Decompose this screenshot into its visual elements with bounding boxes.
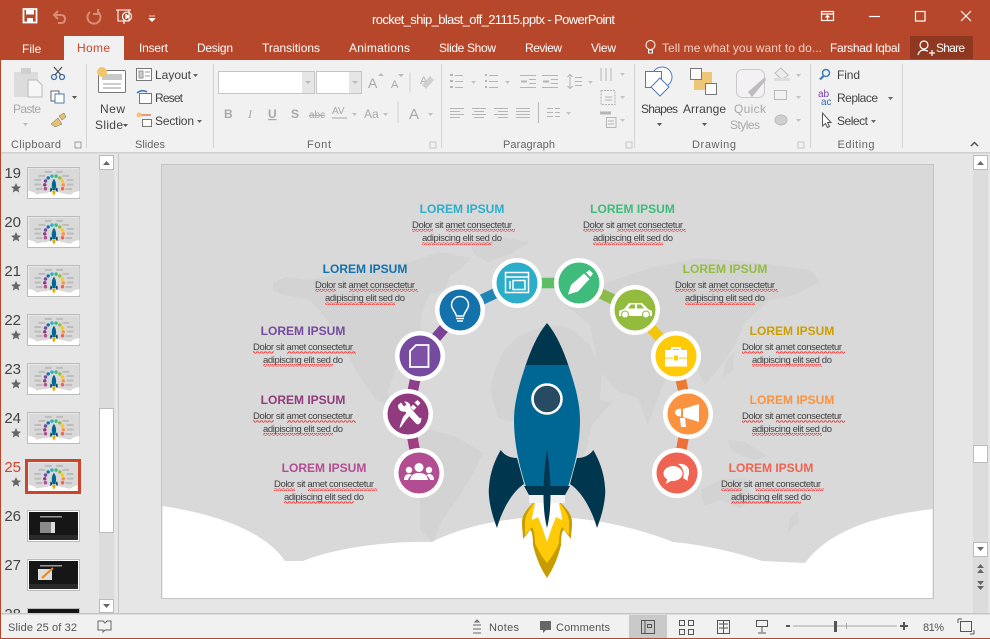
ribbon tabs: Review	[525, 41, 562, 55]
label: lime: adipiscing elit sed do	[685, 293, 765, 304]
font group: U	[268, 107, 277, 121]
icon: fill outline effects	[774, 68, 790, 125]
rocket base band	[524, 486, 570, 495]
thumbnail: slide 25 selected: 25	[4, 459, 21, 476]
window controls	[821, 11, 971, 21]
slides group: Section	[155, 114, 194, 128]
node: car	[610, 285, 660, 335]
label: pink	[274, 461, 377, 504]
font group: A	[420, 75, 428, 87]
label: gold	[742, 324, 845, 367]
icon: format painter	[51, 113, 66, 127]
label: blue: Dolor sit amet consectetur	[315, 280, 415, 291]
icon: lightbulb	[646, 40, 655, 53]
ribbon	[0, 60, 990, 154]
icon: paragraph controls	[450, 68, 616, 128]
icon: notes	[473, 620, 481, 633]
label: pink: adipiscing elit sed do	[284, 492, 364, 503]
ribbon tabs: Slide Show	[439, 41, 496, 55]
title bar	[0, 0, 990, 60]
label: orange: Dolor sit amet consectetur	[742, 411, 842, 422]
label: gold: adipiscing elit sed do	[752, 355, 832, 366]
icon: fit to window	[958, 619, 974, 634]
status bar: 81%	[923, 622, 944, 634]
icon: browser window	[506, 272, 528, 292]
thumbnail: slide 22	[4, 312, 80, 346]
slides group: Reset	[155, 91, 184, 105]
ribbon tabs	[22, 36, 973, 60]
label: lime: Dolor sit amet consectetur	[675, 280, 775, 291]
node: pencil	[554, 258, 604, 308]
thumbnail: slide 21	[4, 263, 80, 296]
icon: cut	[52, 67, 64, 80]
icon: find	[820, 70, 830, 80]
icon: copy	[51, 91, 64, 103]
icon: arrange	[690, 68, 716, 94]
icon: briefcase	[665, 347, 687, 366]
icon: comments	[540, 621, 551, 633]
thumbnail: slide 23	[4, 361, 80, 394]
label: pink: LOREM IPSUM	[282, 461, 366, 475]
right scrollbar	[973, 155, 988, 613]
thumbnail: slide 20	[4, 214, 80, 248]
label: blue: adipiscing elit sed do	[325, 293, 405, 304]
label: magenta: adipiscing elit sed do	[263, 424, 343, 435]
label: magenta	[253, 393, 356, 436]
label: red: LOREM IPSUM	[729, 461, 813, 475]
font group: A	[409, 106, 419, 123]
icon: car	[619, 303, 652, 318]
label: purple: adipiscing elit sed do	[263, 355, 343, 366]
thumbnail: slide 26: 26	[4, 508, 21, 525]
editing group: Find	[837, 68, 860, 82]
icon: megaphone	[675, 404, 699, 427]
icon: people	[404, 463, 434, 480]
drawing group: Shapes	[641, 102, 678, 116]
icon: reset	[137, 91, 152, 104]
thumbnail: slide 24	[4, 410, 80, 444]
drawing group: Drawing	[692, 139, 736, 151]
icon: select	[822, 113, 831, 128]
font group: A	[391, 79, 399, 91]
icon: section	[136, 112, 152, 126]
icon: customize toolbar	[149, 16, 155, 22]
status bar: Slide 25 of 32	[8, 622, 77, 634]
icon: wrench and screwdriver	[398, 400, 421, 428]
label: teal: LOREM IPSUM	[420, 202, 504, 216]
label: purple	[253, 324, 356, 367]
thumbnail: slide 27	[4, 557, 80, 590]
connector arc	[408, 283, 688, 473]
thumbnail: slide 19	[4, 165, 80, 198]
thumbnail scrollbar	[99, 155, 114, 613]
font name and size boxes	[218, 72, 362, 94]
slides group	[95, 67, 202, 151]
node: chat	[652, 448, 702, 498]
icon: speech bubbles	[664, 464, 689, 484]
rocket body	[514, 365, 580, 495]
editing group: Replace	[837, 91, 878, 105]
rocket fins	[489, 450, 605, 528]
ribbon tabs: Animations	[349, 41, 410, 55]
rocket nozzle	[529, 495, 565, 503]
ribbon tabs: Insert	[139, 41, 169, 55]
icon: spell check	[98, 621, 111, 632]
label: red	[721, 461, 824, 504]
font group: abc	[309, 110, 325, 121]
label: orange: LOREM IPSUM	[750, 393, 834, 407]
clipboard group: Clipboard	[11, 139, 61, 151]
ribbon tabs: Home	[77, 41, 110, 55]
icon: replace: ac	[821, 97, 832, 108]
thumbnail: slide 26	[4, 508, 80, 542]
thumbnail: slide 19: 19	[4, 165, 21, 182]
label: teal	[412, 202, 515, 245]
font group: I	[247, 107, 253, 121]
cloud	[162, 506, 932, 598]
node: megaphone	[663, 389, 713, 439]
label: teal: adipiscing elit sed do	[422, 233, 502, 244]
share button: Share	[936, 41, 965, 55]
icon: shapes	[646, 67, 672, 96]
clipboard group: Paste	[13, 102, 41, 116]
rocket	[489, 323, 605, 578]
label: orange	[742, 393, 845, 436]
icon: collapse ribbon	[971, 142, 978, 146]
drawing group: Quick	[734, 102, 767, 116]
ribbon tabs: Farshad Iqbal	[830, 41, 900, 55]
slide canvas	[162, 164, 934, 598]
thumbnail: slide 27: 27	[4, 557, 21, 574]
node: document	[395, 331, 445, 381]
thumbnail: slide 24: 24	[4, 410, 21, 427]
label: pink: Dolor sit amet consectetur	[274, 479, 374, 490]
font group: B	[224, 107, 233, 121]
font group: A	[368, 75, 378, 91]
view buttons	[629, 615, 768, 638]
font group: AV	[332, 106, 345, 117]
ribbon tabs: File	[22, 42, 42, 56]
label: purple: Dolor sit amet consectetur	[253, 342, 353, 353]
icon: undo and redo	[54, 9, 100, 24]
icon: paste	[14, 68, 42, 97]
slides group: Slide	[95, 118, 123, 132]
thumbnail: slide 25 selected	[4, 459, 80, 492]
rocket flame	[522, 503, 572, 578]
slides group: Layout	[155, 68, 192, 82]
ribbon tabs: Design	[197, 41, 233, 55]
thumbnail: slide 21: 21	[4, 263, 21, 280]
label: green: adipiscing elit sed do	[593, 233, 673, 244]
icon: new slide	[97, 67, 126, 92]
drawing group	[641, 67, 804, 151]
icon: quick styles	[736, 70, 766, 98]
icon: save	[24, 9, 36, 22]
icon: replace	[818, 89, 832, 108]
label: lime	[675, 262, 778, 305]
label: blue	[315, 262, 418, 305]
home tab	[64, 36, 124, 60]
icon: start presentation	[116, 10, 132, 24]
editing group: Select	[837, 114, 869, 128]
node: tools	[383, 389, 433, 439]
thumbnail: slide 22: 22	[4, 312, 21, 329]
label: gold: Dolor sit amet consectetur	[742, 342, 842, 353]
node: idea	[435, 285, 485, 335]
icon: document	[410, 345, 428, 367]
ribbon tabs: Transitions	[262, 41, 320, 55]
ribbon tabs: View	[591, 41, 616, 55]
icon: layout	[136, 68, 152, 80]
slides group: Slides	[135, 139, 166, 151]
world map silhouette	[273, 238, 820, 542]
zoom slider	[786, 621, 908, 632]
label: purple: LOREM IPSUM	[261, 324, 345, 338]
icon: light bulb	[452, 296, 468, 321]
node: website	[492, 258, 542, 308]
label: green: Dolor sit amet consectetur	[583, 220, 683, 231]
icon: replace: ab	[818, 89, 830, 100]
paragraph group	[450, 68, 632, 151]
font group	[218, 72, 436, 151]
label: orange: adipiscing elit sed do	[752, 424, 832, 435]
font group: S	[291, 107, 299, 121]
label: lime: LOREM IPSUM	[683, 262, 767, 276]
node: team	[394, 448, 444, 498]
label: magenta: LOREM IPSUM	[261, 393, 345, 407]
status bar: Notes	[489, 622, 520, 634]
node: briefcase	[651, 331, 701, 381]
rocket window	[532, 384, 562, 414]
label: red: Dolor sit amet consectetur	[721, 479, 821, 490]
font group: Aa	[364, 107, 379, 121]
label: gold: LOREM IPSUM	[750, 324, 834, 338]
ribbon tabs: Tell me what you want to do...	[662, 41, 822, 55]
thumbnail: slide 28: 28	[4, 606, 21, 623]
label: green: LOREM IPSUM	[590, 202, 675, 216]
thumbnail: slide 28	[4, 606, 80, 623]
thumbnail: slide 23: 23	[4, 361, 21, 378]
share button	[910, 36, 973, 59]
label: blue: LOREM IPSUM	[323, 262, 407, 276]
editing group	[818, 68, 893, 151]
drawing group: Styles	[730, 118, 760, 132]
slide thumbnails panel	[4, 154, 119, 623]
rocket nose	[526, 323, 568, 365]
clipboard group	[11, 67, 81, 151]
label: green	[583, 202, 686, 245]
icon: pencil	[568, 270, 593, 294]
thumbnail: slide 20: 20	[4, 214, 21, 231]
font group: Font	[307, 139, 331, 151]
slides group: New	[100, 102, 125, 116]
status bar: Comments	[556, 622, 610, 634]
label: magenta: Dolor sit amet consectetur	[253, 411, 353, 422]
editing group: Editing	[838, 139, 874, 151]
label: red: adipiscing elit sed do	[731, 492, 811, 503]
document title: rocket_ship_blast_off_21115.pptx - PowerPoint	[372, 12, 615, 27]
drawing group: Arrange	[683, 102, 726, 116]
rocket centre fin	[544, 450, 550, 528]
paragraph group: Paragraph	[503, 139, 555, 151]
label: teal: Dolor sit amet consectetur	[412, 220, 512, 231]
